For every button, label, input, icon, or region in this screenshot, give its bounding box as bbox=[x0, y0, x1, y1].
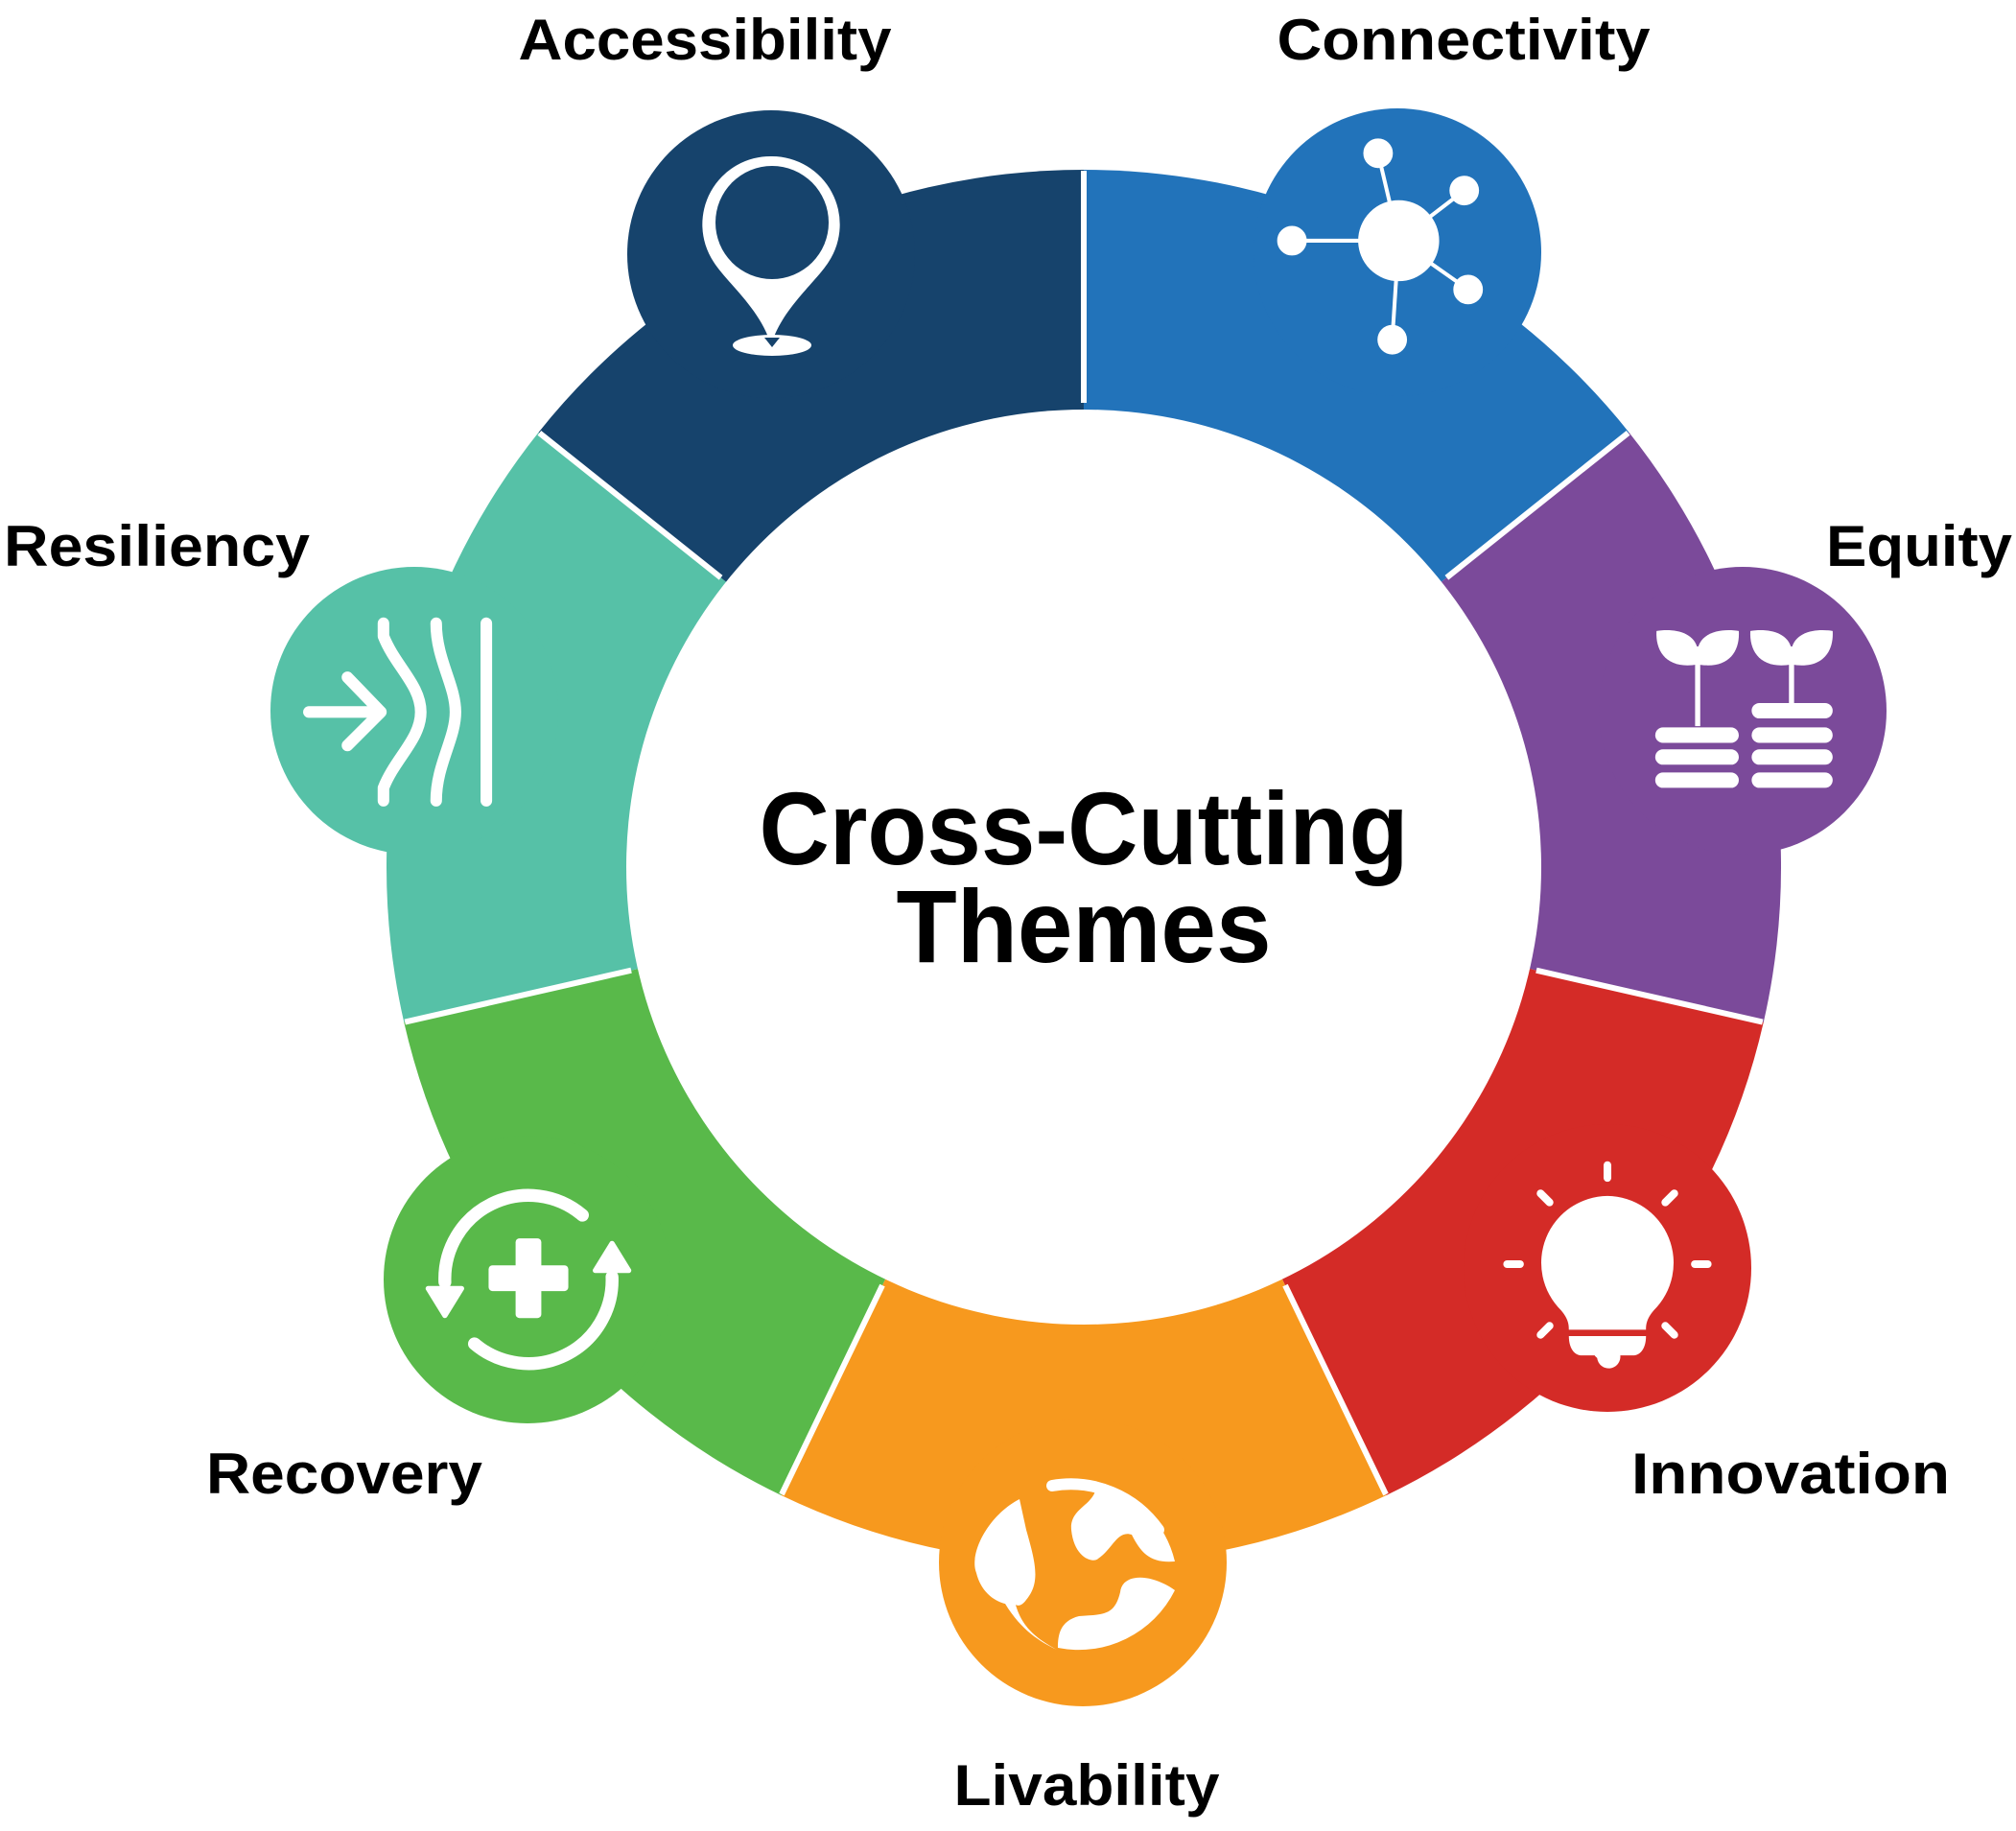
labels: Connectivity bbox=[1278, 8, 1651, 72]
icon: resiliency flow bbox=[309, 623, 486, 801]
labels: Recovery bbox=[206, 1442, 483, 1506]
icon: globe with leaf bbox=[974, 1482, 1175, 1650]
bubbles bbox=[270, 108, 1887, 1706]
labels: Accessibility bbox=[518, 8, 892, 72]
ring segment: Accessibility bbox=[539, 6, 1423, 867]
ring segment: Equity bbox=[1084, 433, 1969, 1293]
ring segment: Connectivity bbox=[1084, 170, 1629, 867]
labels: Equity bbox=[1826, 514, 2013, 578]
ring segment: Resiliency bbox=[283, 336, 1084, 1022]
icon: sprouts and coins bbox=[1655, 630, 1833, 787]
ring segment: Recovery bbox=[290, 630, 1084, 1495]
ring segment: Livability bbox=[593, 867, 1386, 1732]
icon: location pin bbox=[702, 156, 840, 356]
center circle bbox=[626, 410, 1541, 1325]
ring segment: Innovation bbox=[963, 867, 1764, 1554]
labels: Resiliency bbox=[4, 514, 311, 578]
title: Themes bbox=[896, 868, 1272, 984]
icon: recovery cycle with cross bbox=[428, 1195, 629, 1364]
labels: Innovation bbox=[1631, 1442, 1950, 1506]
icon: network bbox=[1279, 140, 1481, 353]
title: Cross-Cutting bbox=[760, 770, 1408, 886]
icon: lightbulb bbox=[1507, 1165, 1708, 1369]
labels: Livability bbox=[953, 1753, 1220, 1818]
title bbox=[760, 770, 1408, 984]
